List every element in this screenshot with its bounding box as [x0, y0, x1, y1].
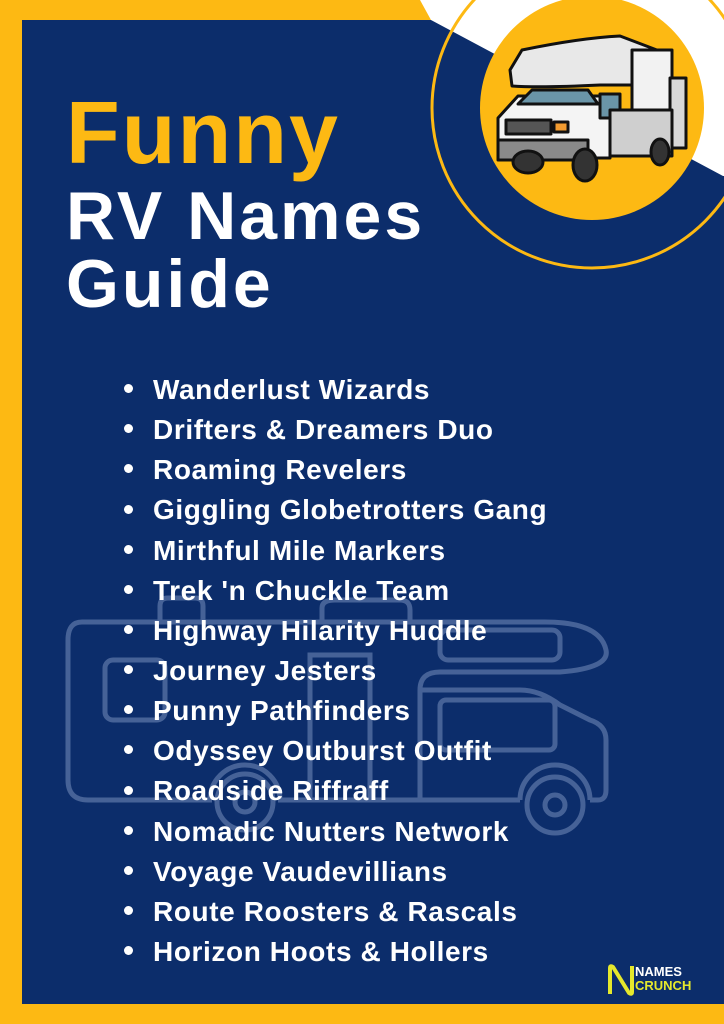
logo text: NAMES — [635, 964, 682, 979]
list of names: Giggling Globetrotters Gang — [153, 494, 547, 525]
list of names: Highway Hilarity Huddle — [153, 615, 487, 646]
list of names: Voyage Vaudevillians — [153, 856, 448, 887]
list of names: Trek 'n Chuckle Team — [153, 575, 450, 606]
title — [66, 83, 425, 322]
list of names: Roaming Revelers — [153, 454, 407, 485]
list of names: Journey Jesters — [153, 655, 377, 686]
list of names: Drifters & Dreamers Duo — [153, 414, 494, 445]
title: RV Names Guide: Guide — [66, 246, 274, 322]
list of names — [124, 374, 547, 967]
title: RV Names Guide — [66, 178, 425, 322]
faint RV outline — [68, 598, 606, 833]
list of names: Horizon Hoots & Hollers — [153, 936, 489, 967]
logo text — [635, 964, 691, 993]
list of names: Punny Pathfinders — [153, 695, 411, 726]
icon: ring and circle with RV — [430, 0, 724, 270]
logo: Names Crunch — [608, 964, 691, 996]
list of names: Mirthful Mile Markers — [153, 535, 446, 566]
list of names: Roadside Riffraff — [153, 775, 389, 806]
title: RV Names Guide: RV Names — [66, 178, 425, 254]
list of names: Wanderlust Wizards — [153, 374, 430, 405]
list of names: Route Roosters & Rascals — [153, 896, 518, 927]
logo text: CRUNCH — [635, 978, 691, 993]
icon: N logo — [608, 964, 634, 996]
title: Funny: Funny — [66, 83, 340, 182]
list of names: Odyssey Outburst Outfit — [153, 735, 492, 766]
list of names: Nomadic Nutters Network — [153, 816, 509, 847]
